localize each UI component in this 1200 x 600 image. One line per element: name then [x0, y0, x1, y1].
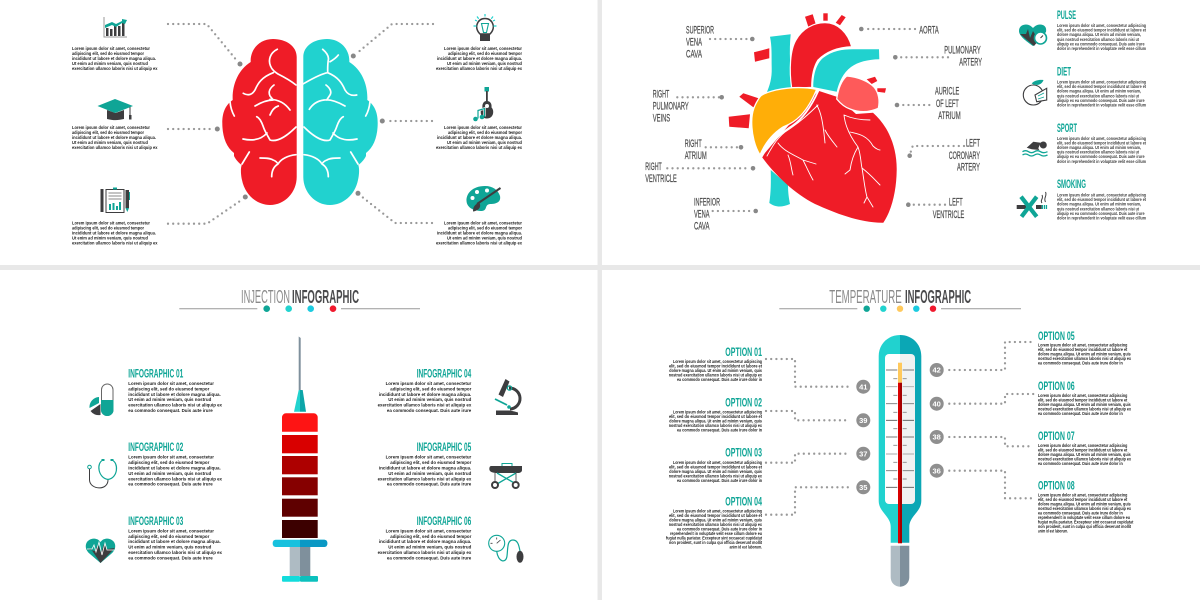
marker: 36: 36	[933, 466, 941, 475]
block: option 01: elit, sed do eiusmod tempor incididunt ut labore et	[669, 364, 762, 368]
text: left bottom: Ut enim ad minim veniam, quis nostrud	[72, 235, 148, 240]
text: right bottom: adipiscing elit, sed do eiusmod tempor	[448, 225, 522, 230]
label: right atrium: RIGHT	[685, 138, 702, 150]
block: diet: elit, sed do eiusmod tempor incididunt ut labore et	[1057, 84, 1146, 89]
block: option 08: Lorem ipsum dolor sit amet, consectetur adipiscing	[1038, 492, 1127, 497]
label: left ventricle: LEFT	[949, 197, 963, 209]
block: option 08: elit, sed do eiusmod tempor incididunt ut labore et	[1038, 497, 1128, 502]
block: option 08: OPTION 08	[1038, 480, 1075, 492]
block: diet	[1057, 66, 1146, 108]
marker: 35	[766, 480, 870, 515]
connector: bottom right	[356, 191, 432, 223]
left auricle	[837, 76, 879, 112]
block: option 02	[669, 397, 762, 433]
panel: heart infographic: CORONARY	[949, 150, 980, 162]
block: option 03: nostrud exercitation ullamco laboris nisi ut aliquip ex	[669, 474, 762, 478]
text: left bottom: adipiscing elit, sed do eiusmod tempor	[72, 225, 144, 230]
icon: pills	[89, 384, 114, 416]
pulmonary artery	[813, 49, 879, 92]
text: left middle: incididunt ut labore et dolore magna aliqua.	[72, 135, 156, 140]
block: infographic 03: Lorem ipsum dolor sit amet, consectetur	[128, 528, 214, 533]
text: right middle: incididunt ut labore et dolore magna aliqua.	[437, 135, 522, 140]
block: infographic 01: incididunt ut labore et dolore magna aliqua.	[128, 392, 221, 397]
block: sport: quis nostrud exercitation ullamco laboris nisi ut	[1057, 150, 1139, 155]
block: option 06: nostrud exercitation ullamco laboris nisi ut aliquip ex	[1038, 406, 1131, 412]
label: right atrium: ATRIUM	[685, 150, 707, 162]
marker: 39: 39	[859, 416, 867, 425]
text: right middle: Ut enim ad minim veniam, quis nostrud	[447, 140, 522, 145]
icon: guitar and note	[473, 87, 493, 121]
text: right top: adipiscing elit, sed do eiusmod tempor	[448, 51, 522, 56]
block: option 05	[1038, 331, 1131, 366]
block: option 03: OPTION 03	[725, 448, 762, 460]
label: aorta: AORTA	[919, 24, 939, 36]
block: option 05: Lorem ipsum dolor sit amet, consectetur adipiscing	[1038, 343, 1127, 348]
block: pulse: dolor in reprehenderit in voluptate velit esse cillum	[1057, 46, 1146, 51]
block: option 01: OPTION 01	[725, 347, 762, 359]
block: option 08: anim id est laborum.	[1038, 528, 1068, 533]
icon: blood pressure gauge	[489, 535, 524, 563]
superior vena cava	[766, 34, 792, 94]
block: infographic 03: INFOGRAPHIC 03	[128, 516, 183, 528]
icon: stethoscope	[88, 460, 117, 488]
block: infographic 03: ea commodo consequat. Duis aute irure	[128, 555, 213, 560]
text: right top: Ut enim ad minim veniam, quis nostrud	[447, 61, 522, 66]
block: infographic 04: exercitation ullamco laboris nisi ut aliquip ex	[378, 403, 472, 408]
panel: temperature infographic	[666, 287, 1134, 587]
icon: growth chart	[104, 17, 127, 37]
text: right top	[436, 46, 522, 71]
block: smoking: Lorem ipsum dolor sit amet, consectetur adipiscing	[1057, 192, 1146, 198]
right atrium	[752, 88, 817, 155]
block: option 07: nostrud exercitation ullamco laboris nisi ut aliquip ex	[1038, 456, 1131, 462]
block: smoking	[1057, 179, 1146, 220]
block: diet: aliquip ex ea commodo consequat. Duis aute irure	[1057, 98, 1145, 103]
block: infographic 03	[128, 516, 222, 560]
block: smoking: elit, sed do eiusmod tempor incididunt ut labore et	[1057, 197, 1146, 202]
label: superior vena cava	[686, 24, 755, 60]
block: infographic 06: ea commodo consequat. Duis aute irure	[387, 555, 472, 560]
block: option 04: reprehenderit in voluptate velit esse cillum dolore eu	[670, 531, 762, 536]
label: left coronary artery	[907, 138, 980, 174]
block: infographic 06	[378, 516, 472, 560]
title: temperature infographic: INFOGRAPHIC	[905, 287, 971, 307]
text: left top: exercitation ullamco laboris nisi ut aliquip ex	[72, 66, 158, 71]
icon: graduation cap	[98, 99, 133, 120]
block: sport: elit, sed do eiusmod tempor incididunt ut labore et	[1057, 140, 1146, 145]
block: option 04: ea commodo consequat. Duis aute irure dolor in	[677, 527, 762, 532]
icon: apple with tape	[1023, 80, 1047, 105]
marker: 37: 37	[859, 449, 867, 458]
text: right top: exercitation ullamco laboris nisi ut aliquip ex	[436, 66, 522, 71]
block: option 07	[1038, 431, 1131, 466]
block: infographic 05: ea commodo consequat. Duis aute irure	[387, 482, 472, 487]
block: option 04: elit, sed do eiusmod tempor incididunt ut labore et	[669, 513, 762, 518]
icon: paint palette	[466, 186, 500, 212]
text: left middle: exercitation ullamco laboris nisi ut aliquip ex	[72, 145, 158, 150]
block: infographic 06: INFOGRAPHIC 06	[417, 516, 471, 528]
block: pulse: dolore magna aliqua. Ut enim ad minim veniam,	[1057, 32, 1141, 37]
connector: middle right	[380, 118, 432, 124]
block: infographic 02: adipiscing elit, sed do eiusmod tempor	[128, 460, 210, 465]
text: left middle: adipiscing elit, sed do eiusmod tempor	[72, 130, 144, 135]
block: option 06: dolore magna aliqua. Ut enim ad minim veniam, quis	[1038, 402, 1131, 407]
label: auricle of left atrium: ATRIUM	[938, 110, 961, 122]
block: infographic 05: exercitation ullamco laboris nisi ut aliquip ex	[378, 476, 472, 481]
block: infographic 02: Lorem ipsum dolor sit amet, consectetur	[128, 455, 214, 460]
block: option 08	[1038, 480, 1134, 533]
block: infographic 06: incididunt ut labore et dolore magna aliqua.	[379, 539, 471, 544]
icon: stretcher	[489, 464, 522, 488]
block: option 05: OPTION 05	[1038, 331, 1075, 343]
block: option 02: dolore magna aliqua. Ut enim ad minim veniam, quis	[669, 419, 762, 424]
text: right top: Lorem ipsum dolor sit amet, consectetur	[444, 46, 522, 51]
block: infographic 05: Lorem ipsum dolor sit amet, consectetur	[386, 455, 471, 460]
text: left bottom	[72, 220, 158, 245]
right hemisphere	[303, 39, 378, 205]
label: superior vena cava: VENA	[686, 36, 702, 48]
icon: light bulb	[474, 14, 496, 41]
block: infographic 05: INFOGRAPHIC 05	[417, 442, 472, 454]
marker: 41	[766, 359, 870, 394]
block: infographic 03: adipiscing elit, sed do eiusmod tempor	[128, 534, 210, 539]
block: diet: DIET	[1057, 66, 1071, 78]
block: option 03: dolore magna aliqua. Ut enim ad minim veniam, quis	[669, 469, 762, 474]
marker: 40	[930, 394, 1033, 411]
text: left bottom: incididunt ut labore et dolore magna aliqua.	[72, 230, 156, 235]
block: infographic 01: ea commodo consequat. Duis aute irure	[128, 408, 213, 413]
text: left top	[72, 46, 158, 71]
block: option 01: Lorem ipsum dolor sit amet, consectetur adipiscing	[673, 359, 762, 364]
block: option 05: nostrud exercitation ullamco laboris nisi ut aliquip ex	[1038, 356, 1131, 361]
text: left top: adipiscing elit, sed do eiusmod tempor	[72, 51, 144, 56]
label: pulmonary artery: PULMONARY	[944, 44, 981, 56]
block: option 04: OPTION 04	[725, 497, 762, 509]
label: right ventricle: VENTRICLE	[645, 173, 677, 185]
vessel stubs	[729, 13, 886, 128]
block: option 06: elit, sed do eiusmod tempor incididunt ut labore et	[1038, 398, 1128, 402]
text: right middle	[436, 125, 522, 150]
label: inferior vena cava	[694, 197, 758, 233]
icon: microscope	[495, 379, 520, 415]
marker: 39	[766, 411, 870, 427]
block: infographic 04	[378, 368, 472, 413]
block: option 04	[666, 497, 762, 550]
block: infographic 04: ea commodo consequat. Duis aute irure	[387, 408, 472, 413]
block: infographic 02: incididunt ut labore et dolore magna aliqua.	[128, 466, 221, 470]
block: option 05: elit, sed do eiusmod tempor incididunt ut labore et	[1038, 347, 1128, 352]
heart illustration	[729, 13, 897, 223]
block: infographic 05: Ut enim ad minim veniam, quis nostrud	[388, 471, 471, 476]
block: option 07: Lorem ipsum dolor sit amet, consectetur adipiscing	[1038, 443, 1127, 448]
block: option 03	[669, 448, 762, 483]
title: injection infographic: INJECTION	[241, 287, 290, 307]
text: right bottom	[436, 220, 522, 245]
marker: 36	[930, 464, 1033, 498]
block: option 06: Lorem ipsum dolor sit amet, consectetur adipiscing	[1038, 393, 1127, 398]
block: option 08: reprehenderit in voluptate velit esse cillum dolore eu	[1038, 515, 1130, 520]
text: left top: Ut enim ad minim veniam, quis nostrud	[72, 61, 148, 66]
connector: bottom left	[168, 194, 248, 224]
block: sport: aliquip ex ea commodo consequat. Duis aute irure	[1057, 154, 1145, 159]
marker: 37	[766, 447, 870, 463]
label: inferior vena cava: CAVA	[694, 221, 710, 233]
text: right bottom: incididunt ut labore et dolore magna aliqua.	[437, 230, 522, 235]
label: auricle of left atrium	[895, 86, 961, 122]
block: smoking: quis nostrud exercitation ullamco laboris nisi ut	[1057, 206, 1139, 211]
label: right pulmonary veins	[653, 88, 724, 124]
block: sport: Lorem ipsum dolor sit amet, consectetur adipiscing	[1057, 136, 1146, 141]
label: right ventricle: RIGHT	[645, 161, 662, 173]
block: option 03: elit, sed do eiusmod tempor incididunt ut labore et	[669, 464, 762, 470]
icon: swimmer	[1022, 142, 1048, 156]
label: inferior vena cava: VENA	[694, 209, 710, 221]
marker: 42	[930, 342, 1033, 377]
block: diet: dolore magna aliqua. Ut enim ad minim veniam,	[1057, 89, 1141, 94]
block: option 02: Lorem ipsum dolor sit amet, consectetur adipiscing	[673, 410, 762, 415]
block: sport	[1057, 123, 1146, 164]
marker: 40: 40	[933, 399, 941, 408]
block: option 05: dolore magna aliqua. Ut enim ad minim veniam, quis	[1038, 352, 1131, 357]
text: right middle: Lorem ipsum dolor sit amet, consectetur	[444, 125, 522, 130]
text: right bottom: Ut enim ad minim veniam, quis nostrud	[447, 235, 522, 240]
marker: 41: 41	[859, 382, 867, 391]
block: option 01: nostrud exercitation ullamco laboris nisi ut aliquip ex	[669, 372, 762, 378]
block: sport: SPORT	[1057, 123, 1077, 135]
coronary veins	[762, 91, 880, 207]
block: infographic 03: Ut enim ad minim veniam, quis nostrud	[128, 545, 211, 550]
text: left top: incididunt ut labore et dolore magna aliqua.	[72, 56, 156, 61]
block: infographic 01: adipiscing elit, sed do eiusmod tempor	[128, 386, 210, 391]
panel: heart infographic	[645, 10, 1146, 233]
icon: pulse heart with gauge	[1019, 24, 1046, 46]
block: pulse: elit, sed do eiusmod tempor incididunt ut labore et	[1057, 28, 1146, 33]
block: infographic 04: incididunt ut labore et dolore magna aliqua.	[379, 392, 471, 397]
block: infographic 05: adipiscing elit, sed do eiusmod tempor	[390, 460, 472, 465]
block: option 08: fugiat nulla pariatur. Excepteur sint occaecat cupidatat	[1038, 519, 1134, 524]
thermometer	[879, 335, 921, 587]
block: infographic 06: adipiscing elit, sed do eiusmod tempor	[390, 534, 472, 539]
panel: injection infographic	[86, 287, 524, 582]
inferior vena cava	[769, 170, 790, 207]
block: infographic 03: exercitation ullamco laboris nisi ut aliquip ex	[128, 550, 222, 555]
brain illustration	[222, 39, 378, 205]
block: infographic 01	[128, 368, 222, 413]
text: right bottom: exercitation ullamco laboris nisi ut aliquip ex	[436, 240, 522, 245]
title: injection infographic: INFOGRAPHIC	[292, 287, 359, 307]
text: right middle: adipiscing elit, sed do eiusmod tempor	[448, 130, 522, 135]
text: left middle: Lorem ipsum dolor sit amet, consectetur	[72, 125, 150, 130]
text: left top: Lorem ipsum dolor sit amet, consectetur	[72, 46, 150, 51]
label: right ventricle	[645, 161, 755, 185]
block: infographic 01: Ut enim ad minim veniam, quis nostrud	[128, 397, 211, 402]
connector: middle left	[168, 126, 220, 132]
block: smoking: dolore magna aliqua. Ut enim ad minim veniam,	[1057, 202, 1141, 207]
block: option 08: dolore magna aliqua. Ut enim ad minim veniam, quis	[1038, 501, 1131, 506]
block: infographic 02: exercitation ullamco laboris nisi ut aliquip ex	[128, 476, 222, 481]
block: option 04: non proident, sunt in culpa qui officia deserunt mollit	[669, 540, 762, 545]
marker: 42: 42	[933, 366, 941, 375]
block: infographic 02: INFOGRAPHIC 02	[128, 442, 183, 454]
block: option 07: ea commodo consequat. Duis aute irure dolor in	[1038, 461, 1123, 466]
block: infographic 06: exercitation ullamco laboris nisi ut aliquip ex	[378, 550, 472, 555]
block: option 04: fugiat nulla pariatur. Excepteur sint occaecat cupidatat	[666, 536, 762, 541]
block: option 08: nostrud exercitation ullamco laboris nisi ut aliquip ex	[1038, 506, 1131, 511]
ventricle	[762, 91, 897, 223]
block: option 03: ea commodo consequat. Duis aute irure dolor in	[677, 478, 762, 483]
marker: 38	[930, 430, 1033, 446]
block: option 06: OPTION 06	[1038, 381, 1075, 393]
label: pulmonary artery: ARTERY	[959, 57, 982, 69]
label: left coronary artery: LEFT	[966, 138, 980, 150]
block: infographic 02: ea commodo consequat. Duis aute irure	[128, 482, 213, 487]
text: right middle: exercitation ullamco laboris nisi ut aliquip ex	[436, 145, 522, 150]
text: left bottom: Lorem ipsum dolor sit amet, consectetur	[72, 220, 150, 225]
block: infographic 02	[128, 442, 222, 487]
block: option 06	[1038, 381, 1131, 416]
label: aorta	[859, 24, 939, 36]
label: auricle of left atrium: AURICLE	[935, 86, 959, 98]
label: inferior vena cava: INFERIOR	[694, 197, 720, 209]
label: superior vena cava: SUPERIOR	[686, 24, 714, 36]
marker: 38: 38	[933, 433, 941, 442]
block: pulse: PULSE	[1057, 10, 1076, 22]
block: option 02: elit, sed do eiusmod tempor incididunt ut labore et	[669, 414, 762, 419]
block: smoking: aliquip ex ea commodo consequat. Duis aute irure	[1057, 211, 1145, 216]
label: right atrium	[685, 138, 743, 162]
block: option 08: non proident, sunt in culpa qui officia deserunt mollit	[1038, 524, 1131, 529]
text: right bottom: Lorem ipsum dolor sit amet, consectetur	[444, 220, 522, 225]
text: right top: incididunt ut labore et dolore magna aliqua.	[437, 56, 522, 61]
label: right pulmonary veins: RIGHT	[653, 88, 669, 100]
block: option 01	[669, 347, 762, 382]
block: option 04: dolore magna aliqua. Ut enim ad minim veniam, quis	[669, 518, 762, 523]
label: left coronary artery: ARTERY	[957, 162, 980, 174]
block: infographic 06: Lorem ipsum dolor sit amet, consectetur	[386, 528, 471, 533]
connector: top right	[351, 24, 433, 58]
label: right pulmonary veins: PULMONARY	[653, 100, 689, 112]
block: option 06: ea commodo consequat. Duis aute irure dolor in	[1038, 411, 1123, 416]
aorta	[790, 23, 852, 88]
block: sport: dolore magna aliqua. Ut enim ad minim veniam,	[1057, 145, 1141, 150]
icon: cardiogram heart	[86, 539, 115, 563]
block: infographic 01: exercitation ullamco laboris nisi ut aliquip ex	[128, 403, 222, 408]
block: option 01: ea commodo consequat. Duis aute irure dolor in	[677, 377, 762, 382]
label: left ventricle: VENTRICLE	[933, 209, 964, 221]
block: option 01: dolore magna aliqua. Ut enim ad minim veniam, quis	[669, 368, 762, 373]
label: right pulmonary veins: VEINS	[653, 112, 670, 124]
block: infographic 04: Ut enim ad minim veniam, quis nostrud	[388, 397, 471, 402]
block: pulse: aliquip ex ea commodo consequat. Duis aute irure	[1057, 41, 1145, 46]
title: temperature infographic	[779, 287, 1021, 312]
block: option 03: Lorem ipsum dolor sit amet, consectetur adipiscing	[673, 460, 762, 465]
text: left bottom: exercitation ullamco laboris nisi ut aliquip ex	[72, 240, 158, 245]
title: injection infographic	[179, 287, 420, 312]
block: infographic 04: Lorem ipsum dolor sit amet, consectetur	[386, 381, 471, 386]
block: infographic 06: Ut enim ad minim veniam, quis nostrud	[388, 545, 471, 550]
syringe	[273, 336, 327, 582]
block: smoking: SMOKING	[1057, 179, 1086, 191]
block: infographic 02: Ut enim ad minim veniam, quis nostrud	[128, 471, 211, 476]
icon: no smoking	[1017, 192, 1047, 217]
icon: clipboard report	[100, 188, 130, 212]
block: diet: Lorem ipsum dolor sit amet, consectetur adipiscing	[1057, 80, 1146, 84]
label: pulmonary artery	[893, 44, 982, 69]
label: auricle of left atrium: OF LEFT	[936, 98, 959, 110]
block: option 02: OPTION 02	[725, 397, 762, 409]
block: pulse	[1057, 10, 1146, 51]
block: infographic 01: INFOGRAPHIC 01	[128, 368, 184, 380]
block: option 02: nostrud exercitation ullamco laboris nisi ut aliquip ex	[669, 423, 762, 428]
block: pulse: quis nostrud exercitation ullamco laboris nisi ut	[1057, 37, 1139, 42]
marker: 35: 35	[859, 483, 867, 492]
text: left middle	[72, 125, 158, 150]
block: infographic 04: adipiscing elit, sed do eiusmod tempor	[390, 386, 472, 391]
block: infographic 03: incididunt ut labore et dolore magna aliqua.	[128, 539, 221, 544]
block: option 07: dolore magna aliqua. Ut enim ad minim veniam, quis	[1038, 452, 1131, 457]
block: option 04: Lorem ipsum dolor sit amet, consectetur adipiscing	[673, 509, 762, 514]
block: option 04: nostrud exercitation ullamco laboris nisi ut aliquip ex	[669, 522, 762, 527]
block: option 07: elit, sed do eiusmod tempor incididunt ut labore et	[1038, 448, 1128, 452]
block: smoking: dolor in reprehenderit in voluptate velit esse cillum	[1057, 216, 1146, 220]
block: infographic 04: INFOGRAPHIC 04	[417, 368, 472, 380]
block: infographic 05	[378, 442, 472, 487]
connector: top left	[168, 24, 242, 66]
block: infographic 01: Lorem ipsum dolor sit amet, consectetur	[128, 381, 214, 386]
label: superior vena cava: CAVA	[686, 48, 702, 60]
block: pulse: Lorem ipsum dolor sit amet, consectetur adipiscing	[1057, 23, 1146, 28]
block: diet: dolor in reprehenderit in voluptate velit esse cillum	[1057, 102, 1146, 108]
block: option 04: anim id est laborum.	[730, 545, 762, 550]
block: sport: dolor in reprehenderit in voluptate velit esse cillum	[1057, 159, 1146, 164]
left hemisphere	[222, 39, 297, 205]
thermometer scale	[886, 370, 914, 487]
block: option 02: ea commodo consequat. Duis aute irure dolor in	[677, 428, 762, 433]
label: left ventricle	[906, 197, 964, 221]
block: option 05: ea commodo consequat. Duis aute irure dolor in	[1038, 361, 1123, 366]
block: option 08: ea commodo consequat. Duis aute irure dolor in	[1038, 510, 1123, 515]
text: left middle: Ut enim ad minim veniam, quis nostrud	[72, 140, 148, 145]
block: infographic 05: incididunt ut labore et dolore magna aliqua.	[379, 466, 471, 470]
block: diet: quis nostrud exercitation ullamco laboris nisi ut	[1057, 93, 1139, 98]
title: temperature infographic: TEMPERATURE	[829, 287, 902, 307]
panel: brain infographic	[72, 14, 522, 245]
block: option 07: OPTION 07	[1038, 431, 1075, 443]
